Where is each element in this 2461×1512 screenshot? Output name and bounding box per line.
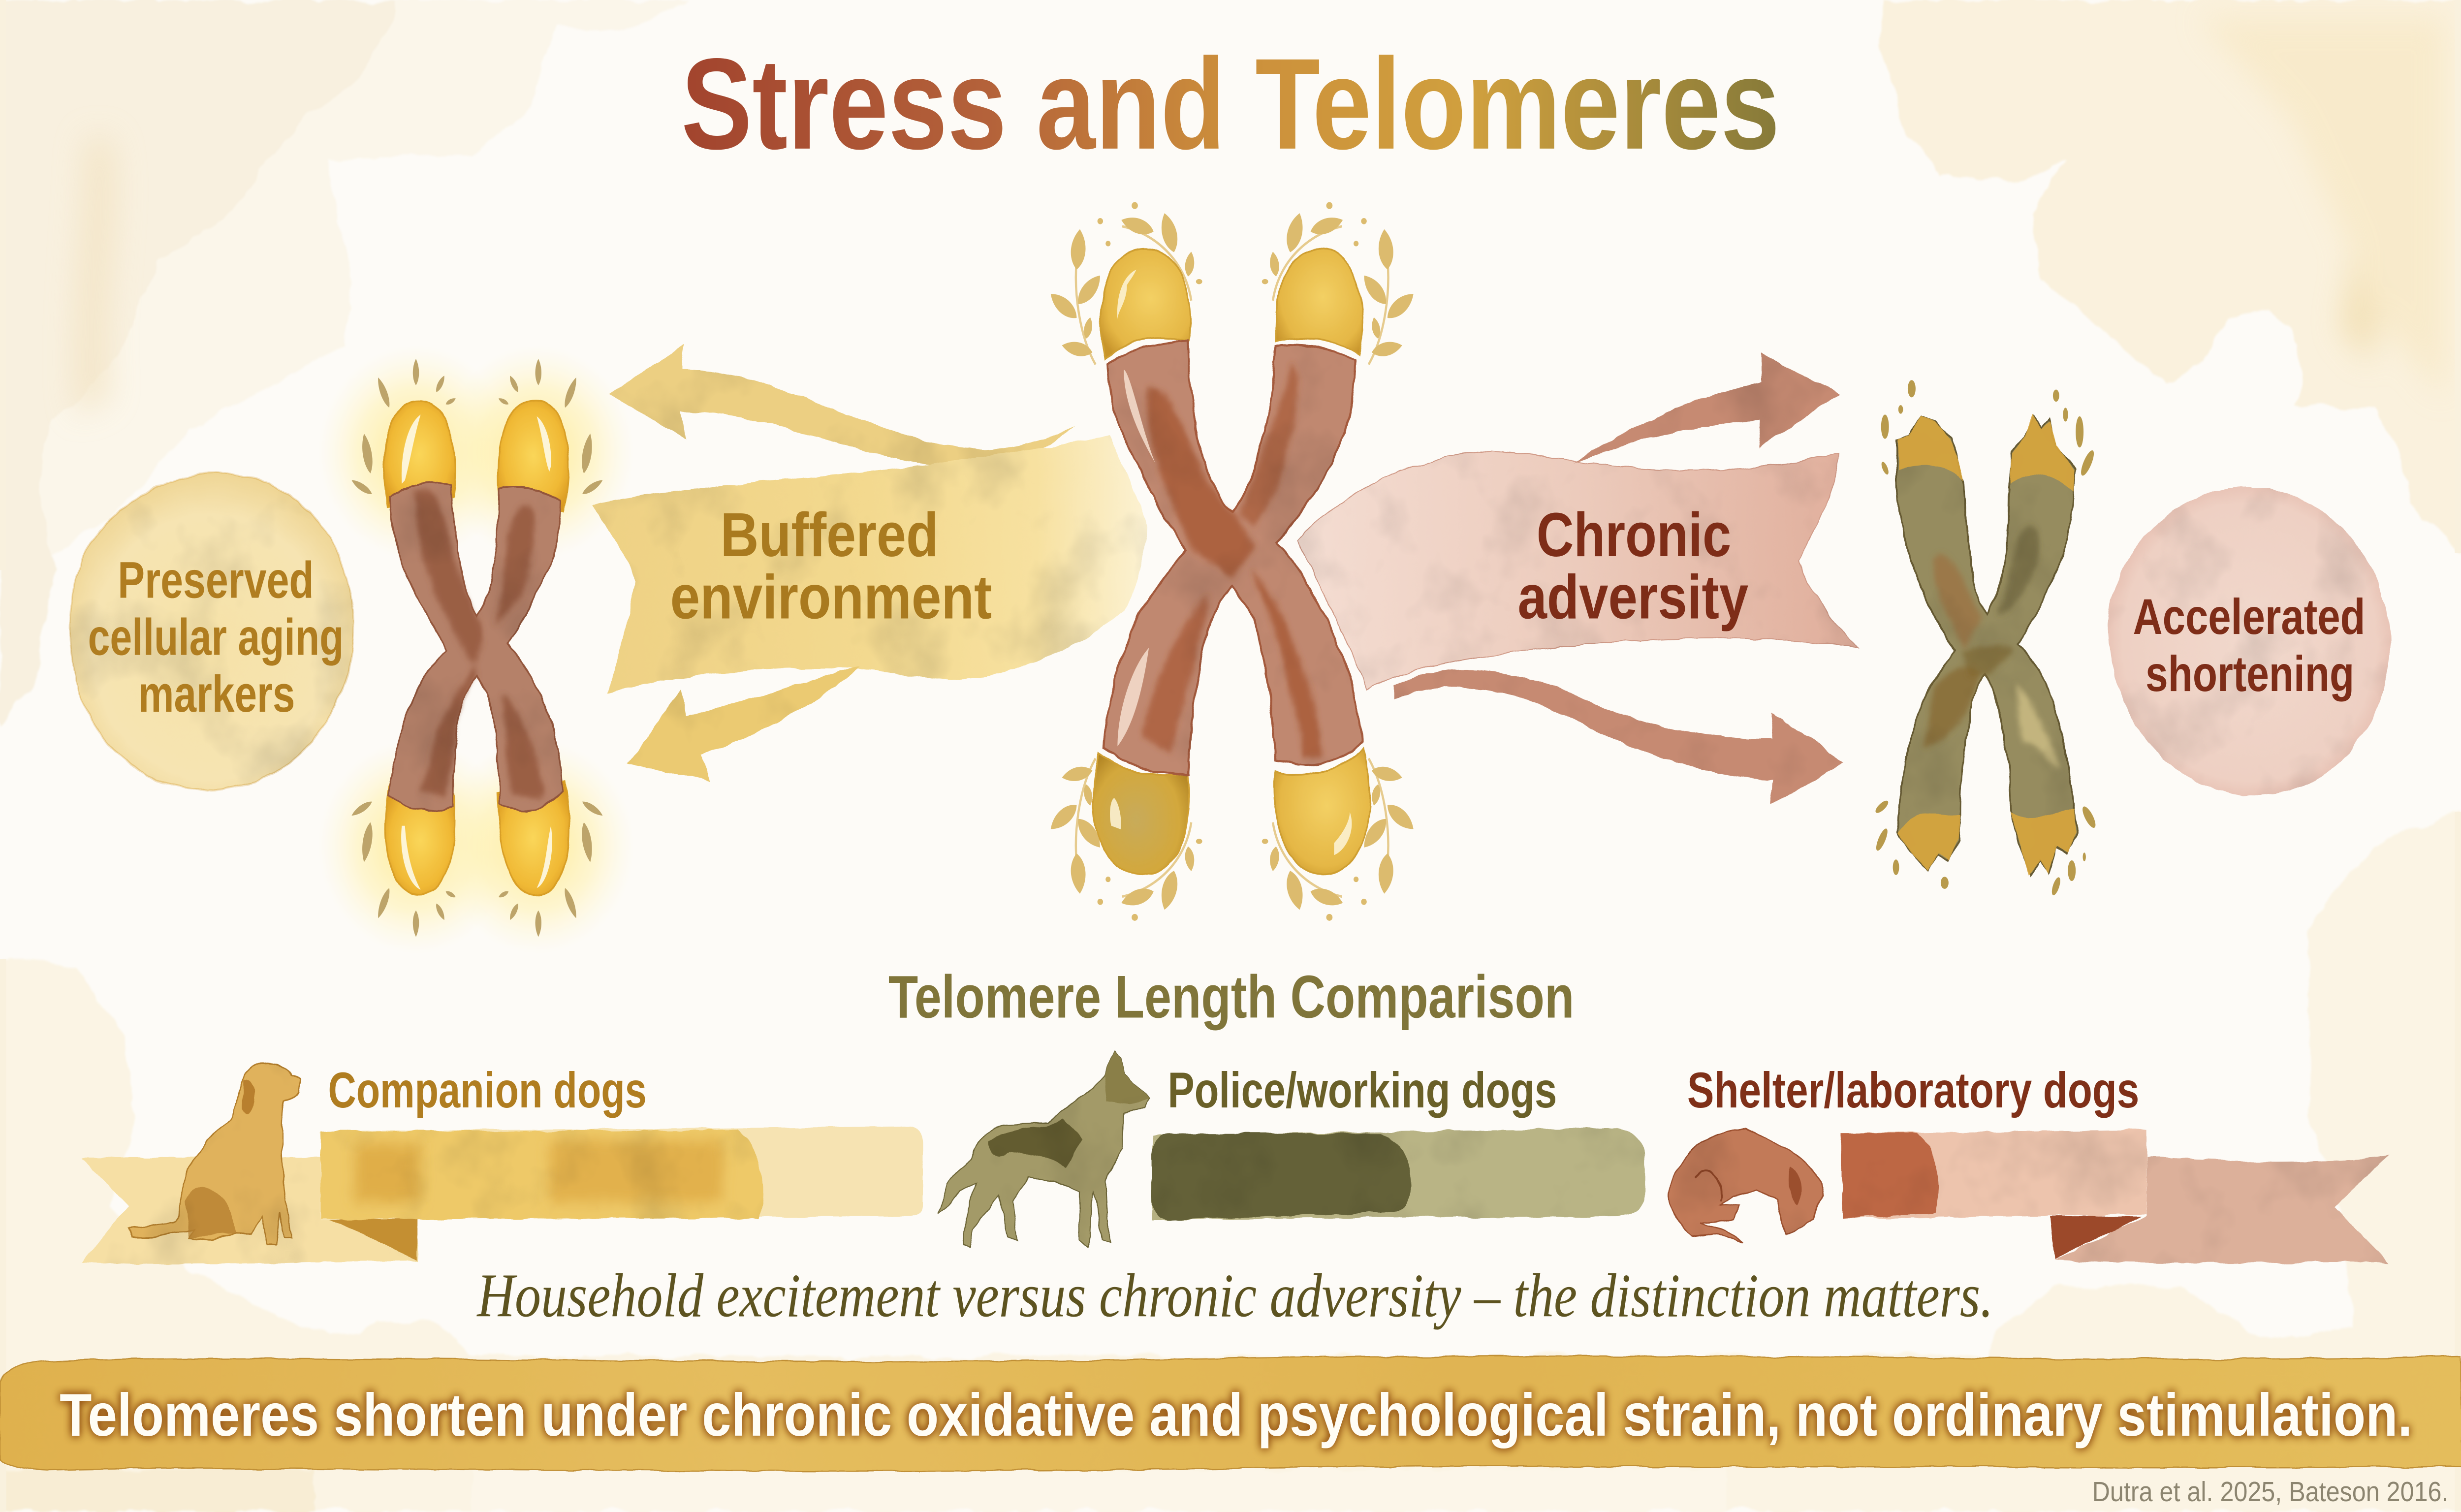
icon: chromosome body — [389, 482, 562, 811]
bar track — [320, 1127, 923, 1220]
panel: buffered environment banner: environment — [670, 563, 992, 632]
arrow: lower buffered arrow — [628, 667, 860, 781]
panel: chronic adversity banner — [1298, 451, 1857, 690]
panel: buffered environment banner — [592, 437, 1147, 693]
bar fill — [320, 1130, 763, 1220]
heading: telomere length comparison: Telomere Length Comparison — [888, 963, 1574, 1031]
script caption: Household excitement versus chronic adversity – the distinction matters. — [476, 1261, 1993, 1330]
icon: curled resting dog — [1670, 1128, 1824, 1242]
ribbon fold — [2050, 1216, 2143, 1260]
icon: cap highlights — [401, 414, 552, 890]
label: Police/working dogs — [1167, 1062, 1557, 1118]
icon: laurel sprigs — [1046, 202, 1418, 921]
label: Shelter/laboratory dogs — [1687, 1062, 2139, 1118]
icon: sitting dog — [128, 1063, 300, 1244]
circle: preserved cellular aging markers — [70, 473, 353, 789]
icon: glow around telomere caps — [318, 346, 634, 954]
left chromosome: preserved telomeres — [318, 346, 634, 954]
bar fill — [1841, 1134, 1939, 1218]
circle: preserved cellular aging markers: markers — [138, 665, 295, 723]
arrow: upper buffered arrow — [609, 344, 1075, 467]
icon: telomere caps — [1094, 249, 1369, 874]
title: Stress and Telomeres — [681, 32, 1780, 176]
ribbon tail — [2054, 1156, 2389, 1263]
panel: buffered environment banner: Buffered — [721, 500, 939, 569]
icon: four telomere caps — [384, 401, 569, 895]
icon: torn gold telomere ends — [1897, 414, 2077, 876]
ribbon tail — [82, 1158, 417, 1264]
citation: Dutra et al. 2025, Bateson 2016. — [2092, 1477, 2448, 1508]
bottom takeaway band — [0, 1356, 2461, 1471]
bottom takeaway band: Telomeres shorten under chronic oxidative and psychological strain, not ordinary stimulation. — [60, 1381, 2412, 1449]
bar track — [1152, 1128, 1645, 1220]
circle: accelerated shortening — [2108, 487, 2390, 796]
icon: small leaves around caps — [350, 359, 604, 937]
bar track — [1841, 1130, 2147, 1218]
right chromosome: shortened telomeres — [1874, 380, 2098, 896]
center chromosome — [1046, 202, 1418, 921]
label: Companion dogs — [328, 1062, 647, 1118]
arrow: lower adversity arrow — [1394, 669, 1844, 805]
icon: flaking specks — [1874, 380, 2098, 896]
panel: chronic adversity banner: Chronic — [1537, 500, 1731, 569]
panel: shelter/laboratory dogs bar — [1670, 1062, 2389, 1263]
circle: accelerated shortening: Accelerated — [2133, 589, 2365, 645]
icon: chromosome body — [1897, 414, 2077, 876]
icon: chromosome body — [1104, 340, 1361, 774]
circle: preserved cellular aging markers: Preserved — [118, 551, 314, 609]
ribbon fold — [322, 1216, 417, 1260]
arrow: upper adversity arrow — [1574, 354, 1839, 463]
circle: accelerated shortening: shortening — [2145, 646, 2354, 702]
circle: preserved cellular aging markers: cellular aging — [88, 608, 344, 666]
icon: highlights — [1110, 270, 1352, 855]
panel: chronic adversity banner: adversity — [1518, 563, 1748, 632]
panel: companion dogs bar — [82, 1062, 923, 1264]
icon: standing shepherd dog — [939, 1050, 1150, 1247]
bar fill — [1152, 1134, 1411, 1220]
panel: police/working dogs bar — [939, 1050, 1645, 1247]
